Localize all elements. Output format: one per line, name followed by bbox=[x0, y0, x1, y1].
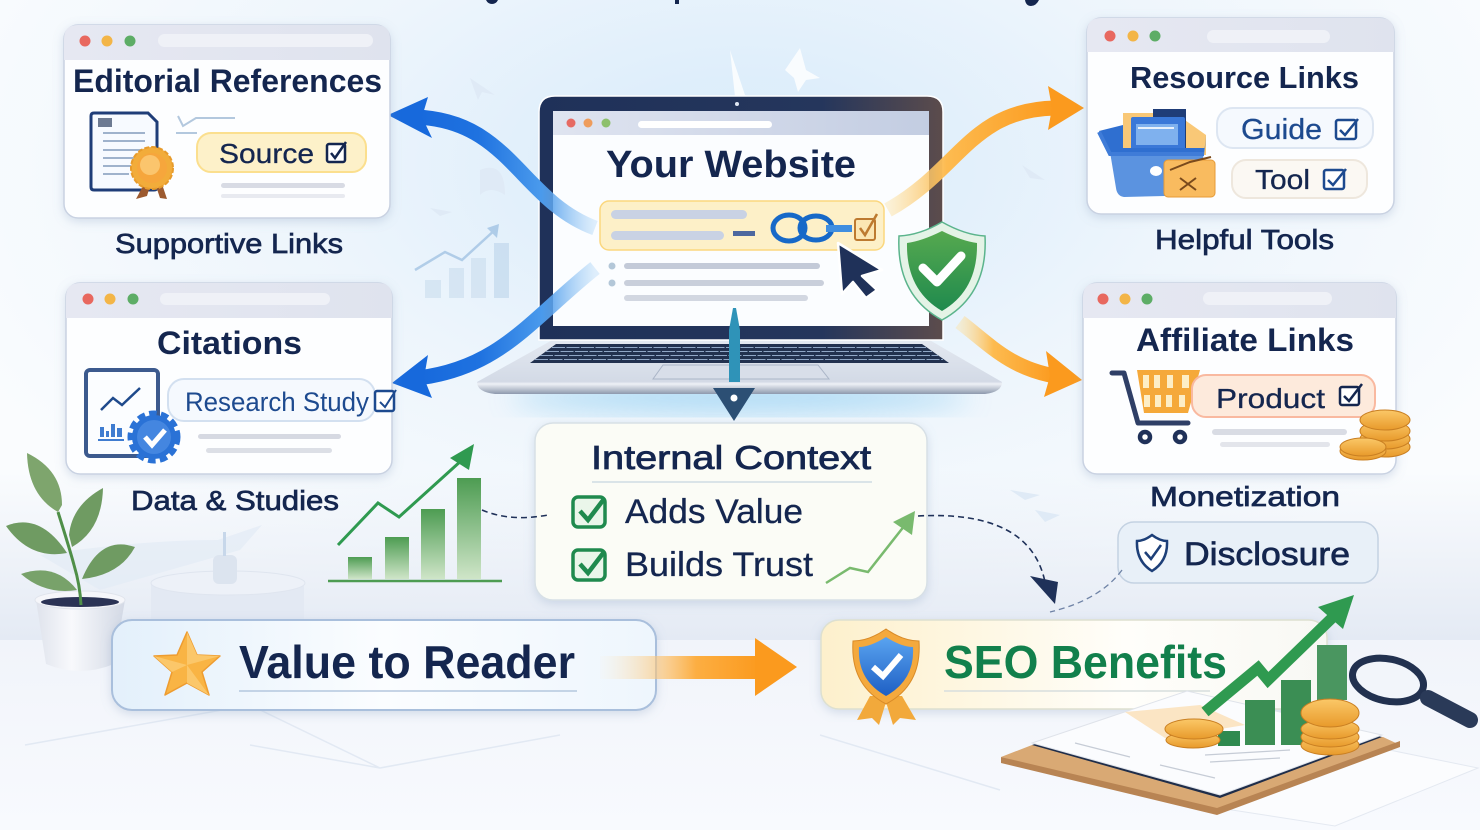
icon: seo badge bbox=[853, 629, 919, 725]
source chip: Source bbox=[219, 138, 314, 169]
panel: resource links bbox=[1087, 18, 1394, 214]
laptop base bbox=[477, 338, 1002, 394]
caption: helpful tools: Helpful Tools bbox=[1155, 224, 1334, 255]
heading: SEO Benefits bbox=[944, 636, 1227, 688]
laptop screen bbox=[553, 111, 929, 326]
arrow: website to internal context bbox=[713, 308, 755, 421]
icon: shopping cart bbox=[1112, 370, 1200, 442]
arrow: website to affiliate links bbox=[960, 322, 1082, 397]
arrow: website to citations bbox=[392, 268, 595, 398]
heading: Affiliate Links bbox=[1136, 322, 1354, 358]
podium decoration bbox=[40, 525, 305, 623]
heading: Value to Reader bbox=[239, 636, 575, 688]
trackpad bbox=[653, 365, 829, 379]
panel: internal context bbox=[535, 423, 927, 600]
caption: monetization: Monetization bbox=[1150, 481, 1340, 512]
icon: magnifying glass bbox=[1348, 652, 1470, 720]
heading: Editorial References bbox=[73, 63, 382, 99]
guide chip bbox=[1217, 108, 1373, 148]
icon: chart with badge bbox=[86, 370, 176, 459]
checkbox: adds value: Adds Value bbox=[625, 493, 803, 531]
banner: seo benefits bbox=[821, 620, 1327, 725]
icon: green shield bbox=[899, 222, 985, 320]
icon: document with medal bbox=[91, 113, 173, 199]
research study chip bbox=[168, 379, 396, 421]
panel: citations bbox=[66, 283, 396, 474]
plant with pot bbox=[6, 453, 135, 671]
dashed connector: chart to context bbox=[482, 510, 548, 518]
highlighted link row bbox=[600, 201, 884, 250]
icon: edit box bbox=[855, 214, 877, 240]
arrow: value to seo bbox=[600, 638, 797, 696]
pot bbox=[36, 593, 125, 671]
heading: Resource Links bbox=[1130, 60, 1359, 95]
research study chip: Research Study bbox=[185, 387, 369, 417]
leaves bbox=[27, 453, 62, 512]
icon: coins bbox=[1340, 410, 1410, 460]
icon: cursor bbox=[838, 243, 882, 298]
keyboard bbox=[530, 344, 949, 363]
banner: value to reader bbox=[112, 620, 656, 710]
tool chip bbox=[1232, 160, 1367, 198]
source chip bbox=[197, 133, 366, 172]
clipboard and report bbox=[1001, 691, 1400, 815]
stem bbox=[58, 512, 81, 605]
laptop glow bbox=[510, 386, 970, 410]
growth chart with arrow bbox=[1205, 595, 1354, 746]
caption: data and studies: Data & Studies bbox=[131, 485, 339, 516]
cropped title: letter tips visible at the top edge bbox=[486, 0, 1039, 6]
panel: affiliate links bbox=[1083, 283, 1410, 474]
caption: supportive links: Supportive Links bbox=[115, 228, 343, 259]
checkbox: builds trust: Builds Trust bbox=[625, 546, 814, 584]
icon: toolbox bbox=[1099, 109, 1215, 197]
growth bar chart bbox=[328, 444, 502, 581]
small trend arrow bbox=[826, 511, 915, 583]
panel: disclosure bbox=[1118, 522, 1378, 583]
heading: Internal Context bbox=[591, 439, 871, 476]
faint background chart behind laptop bbox=[415, 224, 509, 298]
icon: star bbox=[154, 632, 220, 695]
dashed arrow: context to seo benefits bbox=[918, 516, 1058, 604]
tool chip: Tool bbox=[1255, 164, 1310, 195]
floor paper bbox=[1180, 740, 1478, 826]
icon: coin stacks bbox=[1165, 699, 1359, 755]
dashed connector: disclosure to seo benefits bbox=[1050, 570, 1122, 612]
laptop screen frame bbox=[539, 96, 943, 340]
panel: disclosure: Disclosure bbox=[1184, 536, 1350, 572]
heading: your website: Your Website bbox=[606, 144, 856, 186]
panel: editorial references bbox=[64, 25, 390, 218]
product chip bbox=[1192, 375, 1375, 417]
guide chip: Guide bbox=[1241, 114, 1322, 146]
laptop bbox=[477, 96, 1002, 410]
arrow: website to editorial references bbox=[388, 97, 595, 228]
arrow: website to resource links bbox=[888, 86, 1084, 210]
icon: chain link bbox=[773, 215, 832, 241]
icon: shield check bbox=[1137, 535, 1167, 571]
product chip: Product bbox=[1216, 383, 1325, 414]
content lines bbox=[608, 262, 824, 301]
heading: Citations bbox=[157, 325, 302, 361]
